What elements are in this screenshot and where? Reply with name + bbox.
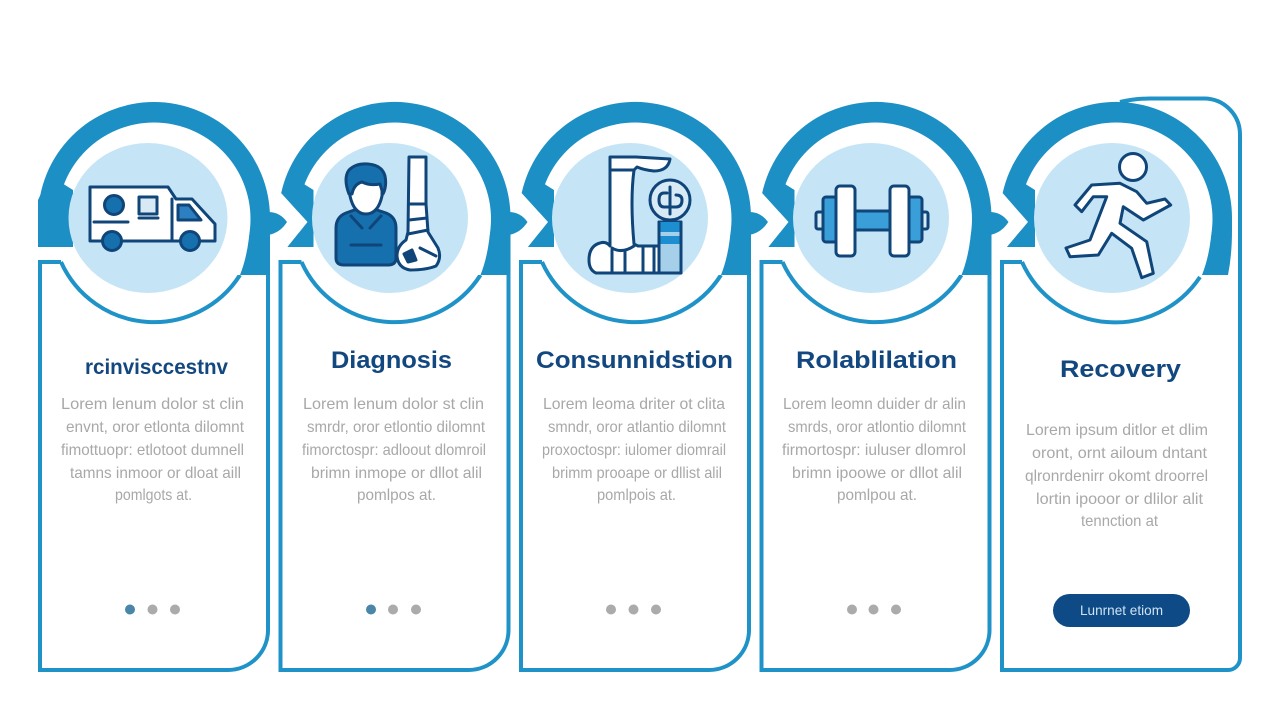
icon: leg cast	[589, 157, 690, 273]
body text 5: tennction at	[1081, 513, 1159, 530]
body text 5	[1025, 422, 1208, 530]
body text 5: qlronrdenirr okomt droorrel	[1025, 468, 1208, 485]
panel: step 5	[1002, 98, 1240, 670]
body text 3: smndr, oror atlantio dilomnt	[548, 419, 727, 436]
icon disc 1	[68, 143, 228, 293]
body text 5: Lorem ipsum ditlor et dlim	[1026, 422, 1208, 439]
ring and arrow 3	[522, 102, 768, 316]
button	[1053, 594, 1190, 627]
body text 4: pomlpou at.	[837, 487, 917, 504]
page dots 2	[366, 604, 421, 614]
body text 1: Lorem lenum dolor st clin	[61, 396, 244, 413]
card outline 5	[1002, 98, 1240, 670]
button: Lunrnet etiom	[1080, 602, 1163, 618]
heading 2: Diagnosis	[331, 347, 452, 374]
ring and arrow 4	[762, 102, 1008, 316]
icon disc 4	[793, 143, 949, 293]
ring and arrow 1	[38, 102, 287, 316]
body text 2: pomlpos at.	[357, 487, 436, 504]
panel: step 2	[280, 102, 528, 670]
icon: runner	[1066, 154, 1171, 278]
body text 1: pomlgots at.	[115, 487, 192, 504]
card outline 3	[521, 262, 749, 670]
page dots 1	[125, 604, 180, 614]
heading 5: Recovery	[1060, 356, 1182, 383]
body text 2: brimn inmope or dllot alil	[311, 465, 482, 482]
body text 2	[302, 396, 486, 504]
icon: dumbbell	[816, 186, 928, 256]
ring 5	[1003, 102, 1232, 315]
body text 2: Lorem lenum dolor st clin	[303, 396, 484, 413]
heading 4: Rolablilation	[796, 347, 957, 374]
body text 3: proxoctospr: iulomer diomrail	[542, 442, 726, 459]
heading 3: Consunnidstion	[536, 347, 733, 374]
page dots 3	[606, 604, 661, 614]
icon: ambulance	[90, 187, 215, 250]
body text 4: Lorem leomn duider dr alin	[783, 396, 966, 413]
body text 1: fimottuopr: etlotoot dumnell	[61, 442, 244, 459]
body text 2: smrdr, oror etlontio dilomnt	[307, 419, 486, 436]
body text 4: smrds, oror atlontio dilomnt	[788, 419, 967, 436]
body text 4	[782, 396, 967, 504]
heading 1: rcinvisccestnv	[85, 356, 228, 379]
body text 2: fimorctospr: adloout dlomroil	[302, 442, 486, 459]
icon disc 5	[1034, 143, 1190, 293]
icon disc 2	[312, 143, 468, 293]
body text 3	[542, 396, 727, 504]
body text 3: Lorem leoma driter ot clita	[543, 396, 725, 413]
panel: step 4	[762, 102, 1008, 670]
body text 1: tamns inmoor or dloat aill	[70, 465, 241, 482]
card outline 4	[762, 262, 990, 670]
page dots 4	[847, 604, 901, 614]
panel: step 1	[38, 102, 287, 670]
body text 3: pomlpois at.	[597, 487, 676, 504]
body text 1: envnt, oror etlonta dilomnt	[66, 419, 245, 436]
ring and arrow 2	[281, 102, 528, 316]
body text 5: lortin ipooor or dlilor alit	[1036, 491, 1204, 508]
icon: clinician and leg	[336, 157, 440, 270]
card outline 2	[280, 262, 508, 670]
card outline 1	[40, 262, 268, 670]
body text 3: brimm prooape or dllist alil	[552, 465, 722, 482]
body text 4: firmortospr: iuluser dlomrol	[782, 442, 966, 459]
body text 1	[61, 396, 245, 504]
body text 5: oront, ornt ailoum dntant	[1032, 445, 1208, 462]
icon disc 3	[552, 143, 708, 293]
body text 4: brimn ipoowe or dllot alil	[792, 465, 962, 482]
panel: step 3	[521, 102, 768, 670]
